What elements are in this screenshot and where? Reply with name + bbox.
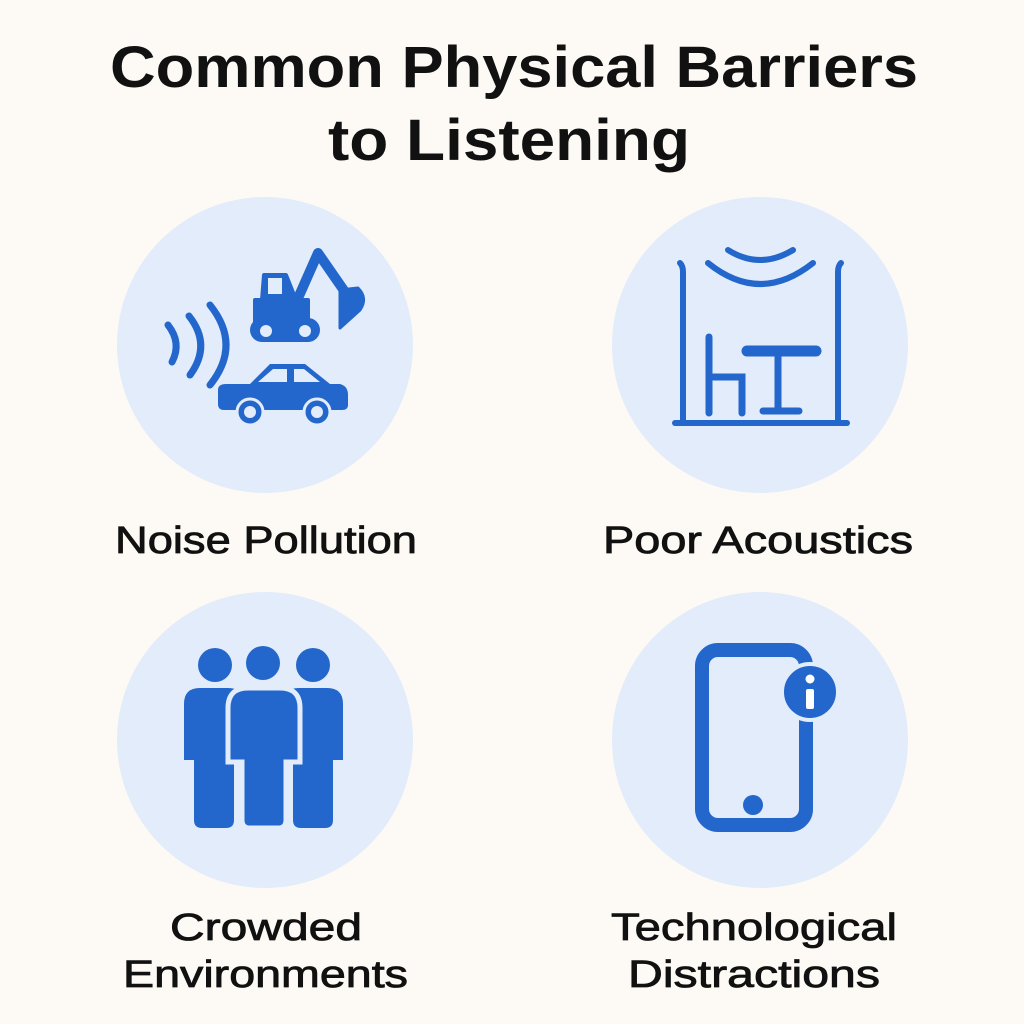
panel: technological distractions <box>611 592 908 996</box>
icon: phone circle <box>612 592 908 888</box>
panel: noise pollution <box>115 197 417 562</box>
title: to Listening <box>328 108 690 173</box>
icon: people <box>184 646 343 828</box>
label: technological distractions: Technological <box>611 907 897 949</box>
label: noise pollution: Noise Pollution <box>115 520 417 562</box>
label: crowded environments: Crowded <box>170 907 362 949</box>
icon: acoustics circle <box>612 197 908 493</box>
label: technological distractions: Distractions <box>628 954 880 996</box>
label: crowded environments: Environments <box>123 954 408 996</box>
icon: room <box>675 250 847 423</box>
title <box>110 35 918 173</box>
icon: crowd circle <box>117 592 413 888</box>
label: crowded environments <box>123 907 408 996</box>
icon: noise <box>168 253 364 425</box>
label: technological distractions <box>611 907 897 996</box>
title: Common Physical Barriers <box>110 35 918 100</box>
icon: phone <box>702 650 838 825</box>
label: poor acoustics: Poor Acoustics <box>603 520 913 562</box>
panel: crowded environments <box>117 592 413 996</box>
icon: noise circle <box>117 197 413 493</box>
panel: poor acoustics <box>603 197 913 562</box>
